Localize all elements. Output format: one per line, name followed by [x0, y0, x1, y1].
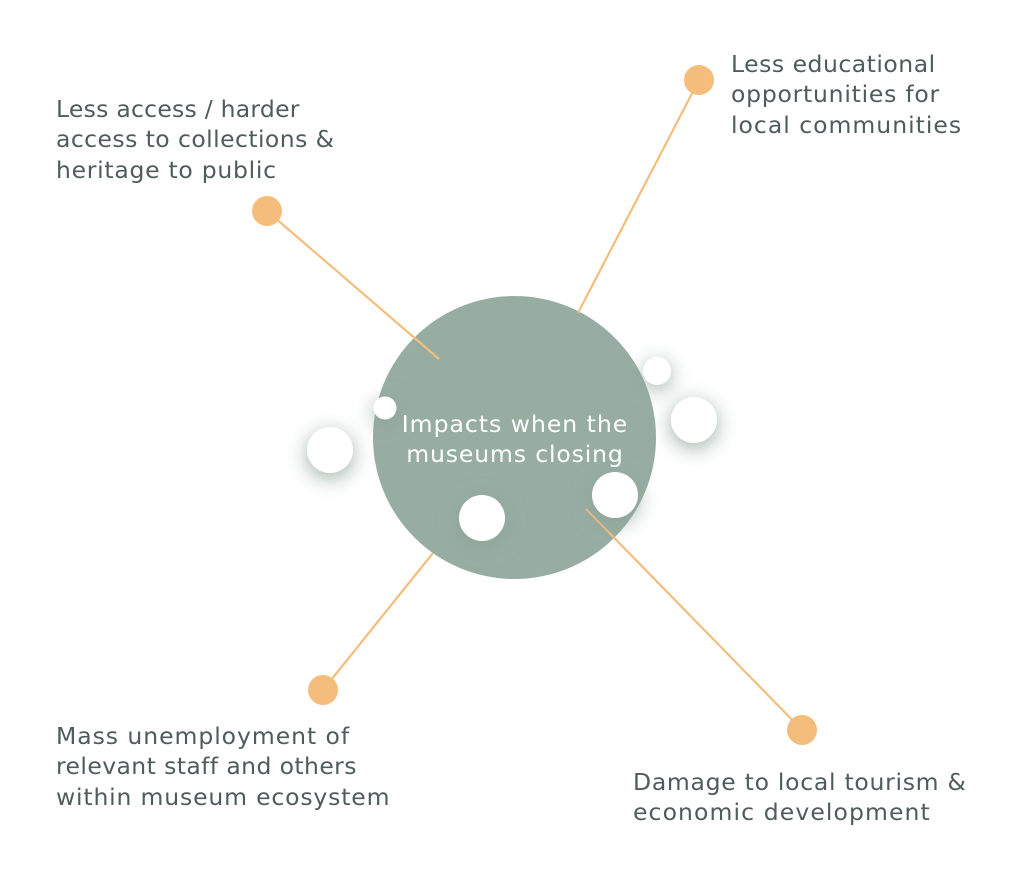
connector: top right: [578, 65, 714, 313]
text: bottom left: Mass unemployment of: [56, 722, 350, 750]
text: top left: [56, 95, 334, 184]
text: top right: [731, 50, 962, 139]
connector: bottom right: [586, 509, 817, 745]
text: top right: local communities: [731, 111, 962, 139]
text: bottom right: Damage to local tourism &: [633, 768, 967, 796]
text: top right: opportunities for: [731, 80, 940, 108]
text: top left: heritage to public: [56, 156, 277, 184]
text: bottom left: relevant staff and others: [56, 752, 357, 780]
text: bottom left: within museum ecosystem: [56, 783, 390, 811]
connector: top left: [252, 196, 439, 359]
connector: bottom left: [308, 553, 433, 705]
floating white dots: [307, 357, 717, 541]
center label: Impacts when the: [402, 410, 628, 438]
text: bottom left: [56, 722, 390, 811]
text: bottom right: economic development: [633, 798, 931, 826]
text: bottom right: [633, 768, 967, 826]
center label: [402, 410, 628, 468]
central circle: [373, 296, 656, 579]
text: top right: Less educational: [731, 50, 936, 78]
center label: museums closing: [406, 440, 624, 468]
text: top left: Less access / harder: [56, 95, 300, 123]
text: top left: access to collections &: [56, 125, 334, 153]
